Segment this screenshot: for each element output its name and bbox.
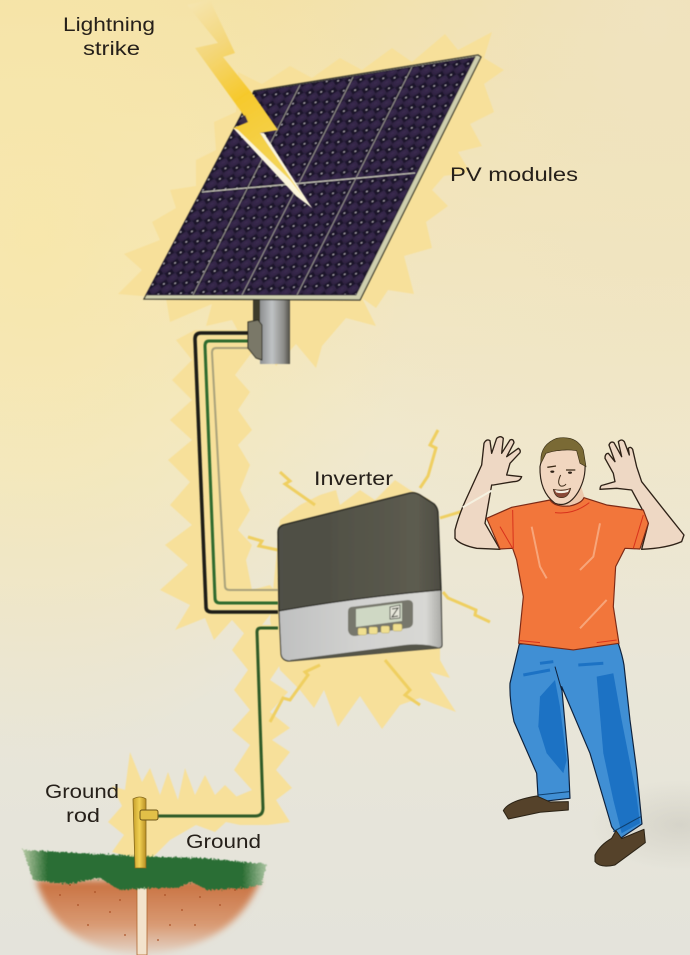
soil speckles: [59, 884, 236, 941]
ground rod: [133, 797, 146, 868]
inverter: [278, 493, 442, 661]
panel cells: [146, 57, 475, 295]
label: ground: Ground: [186, 832, 261, 853]
neck and head: [540, 438, 586, 509]
burst: around solar panel: [118, 32, 504, 368]
left arm and hand: [455, 437, 522, 549]
solar panel: [144, 55, 481, 364]
label: ground rod: Ground: [45, 782, 119, 803]
module dividers: [193, 67, 415, 295]
label: inverter: Inverter: [314, 469, 394, 490]
label: PV modules: PV modules: [450, 165, 578, 186]
burst: around inverter: [270, 480, 456, 729]
wire: green conductor: [205, 341, 278, 603]
burst: along solar wire: [160, 330, 282, 640]
label: ground rod: rod: [66, 806, 100, 827]
glow bursts: [108, 32, 504, 862]
label: ground rod: [45, 782, 119, 827]
right arm and hand: [600, 440, 684, 549]
orange t-shirt: [487, 498, 648, 650]
buried rod: [137, 885, 147, 955]
label: lightning strike: Lightning: [63, 15, 155, 36]
label: lightning strike: strike: [83, 39, 140, 60]
inverter display: [348, 600, 413, 636]
grass: [23, 850, 267, 890]
lightning bolt: [187, 0, 312, 208]
inverter buttons: [358, 624, 402, 635]
jeans: [510, 643, 642, 839]
wire: ground conductor: [158, 628, 278, 816]
label: lightning strike: [63, 15, 155, 60]
ground section: [23, 797, 267, 955]
wires from panel to inverter: [158, 333, 278, 816]
burst: along ground wire: [228, 625, 292, 825]
inverter lower housing: [279, 590, 442, 661]
panel pole: [248, 298, 290, 364]
shoes: [503, 796, 645, 866]
rod clamp: [140, 810, 158, 820]
inverter upper housing: [278, 493, 441, 611]
wire: black conductor: [195, 333, 278, 612]
wire: pale conductor: [212, 348, 278, 590]
burst: around ground rod: [108, 752, 270, 862]
lightning arcs around inverter: [248, 430, 490, 722]
panel frame: [144, 55, 481, 300]
person: [455, 437, 684, 866]
soil: [36, 880, 260, 955]
